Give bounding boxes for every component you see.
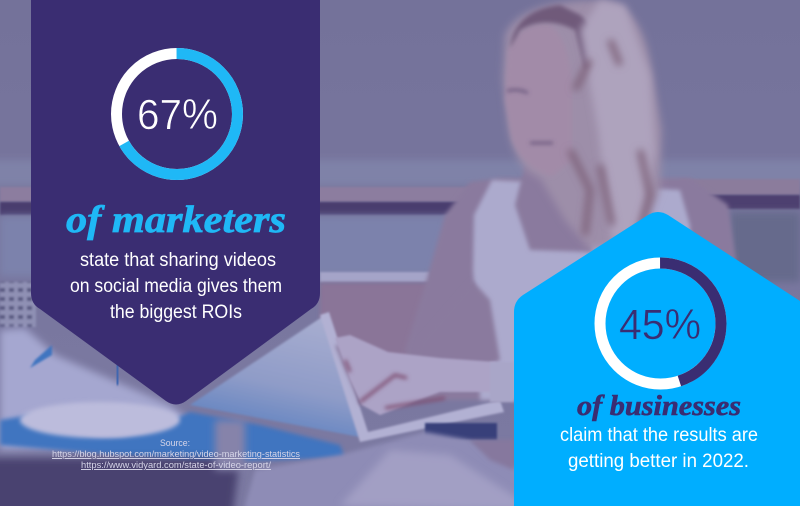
heading: of businesses: of businesses <box>577 390 741 422</box>
clothing and foreground <box>0 420 520 506</box>
laptop <box>190 312 504 442</box>
text block: marketers description: on social media gives them <box>70 276 282 297</box>
table and cup <box>0 282 345 462</box>
panel: businesses <box>514 212 800 506</box>
source citation: Source: <box>160 438 190 449</box>
hands on keyboard <box>335 335 514 440</box>
text block: businesses description: claim that the results are <box>560 425 758 446</box>
donut chart: 67% <box>116 54 238 174</box>
text block: marketers description: state that sharing videos <box>80 250 276 271</box>
donut chart: 45% <box>600 263 721 384</box>
source citation <box>52 438 300 471</box>
text block: businesses description: getting better in 2022. <box>568 451 749 472</box>
donut chart: 45%: 45% <box>619 301 701 349</box>
woman figure <box>335 0 736 405</box>
panel: marketers <box>31 0 320 404</box>
source citation: https://blog.hubspot.com/marketing/video-marketing-statistics <box>52 449 300 460</box>
text block: businesses description <box>560 425 758 472</box>
text block: marketers description <box>70 250 282 323</box>
text block: marketers description: the biggest ROIs <box>110 302 242 323</box>
source citation: https://www.vidyard.com/state-of-video-report/ <box>81 460 271 471</box>
heading: of marketers: of marketers <box>66 199 286 241</box>
donut chart: 67%: 67% <box>137 91 218 139</box>
